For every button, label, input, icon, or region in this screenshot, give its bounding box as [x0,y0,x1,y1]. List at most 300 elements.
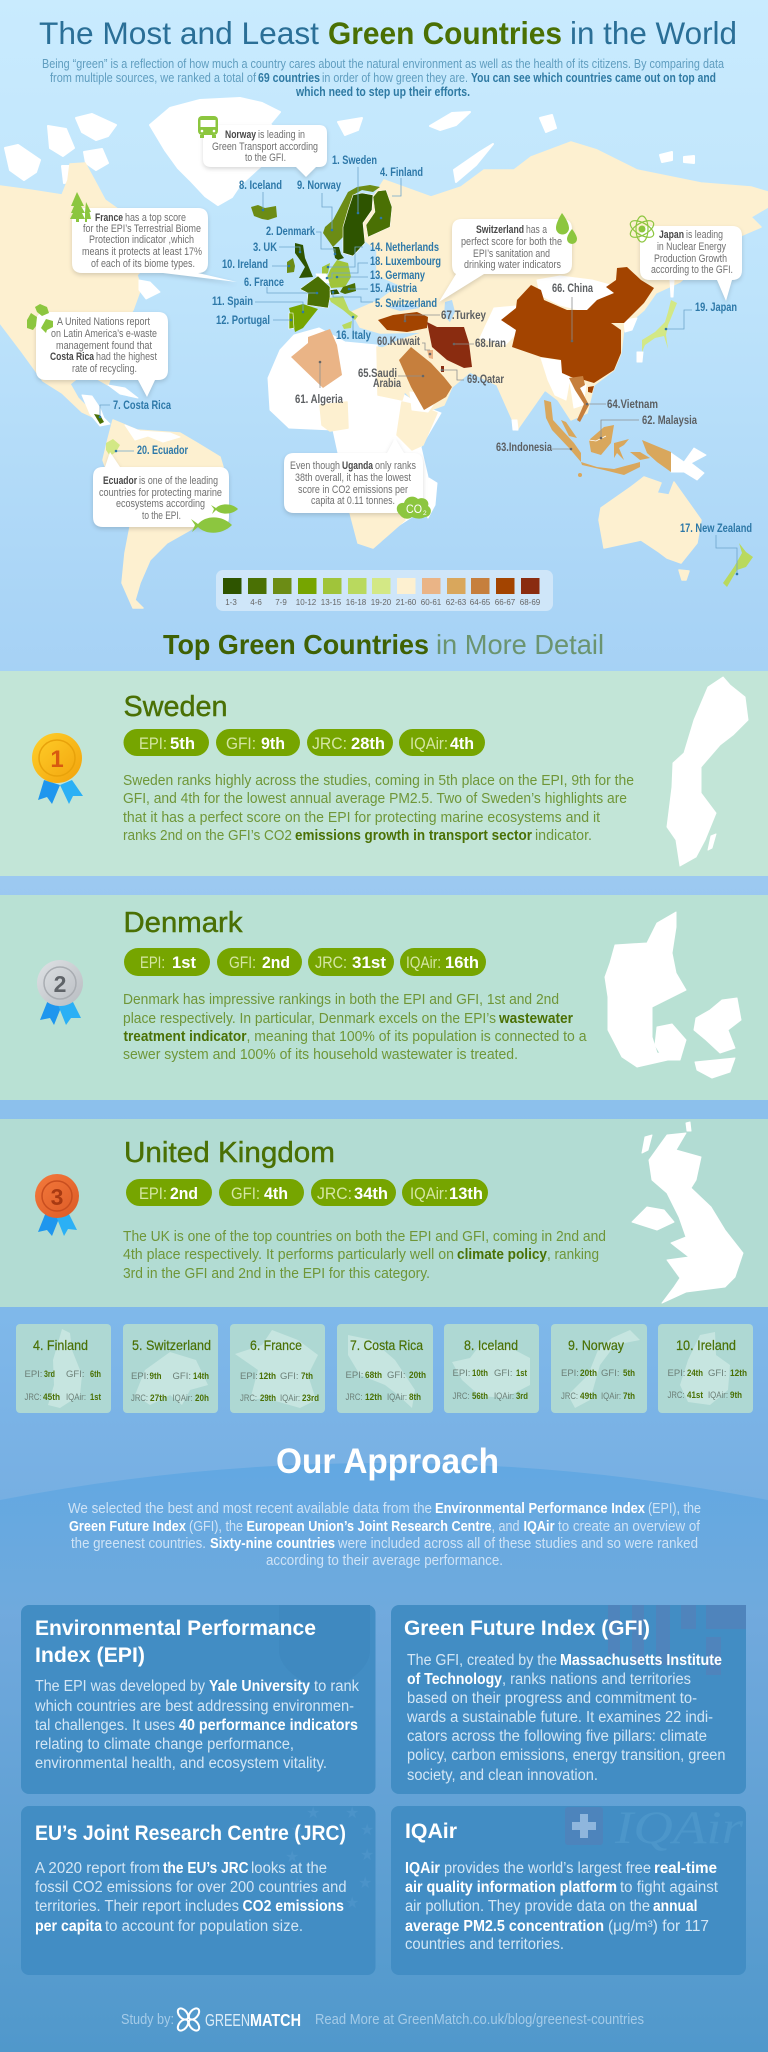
callout: Switzerland: drinking water indicators [464,259,561,271]
callout: Uganda: 38th overall, it has the lowest [295,472,411,484]
Switzerland [330,289,340,295]
body: the EU’s JRC [163,1860,248,1877]
ranking pills: 9th [261,734,285,753]
Caspian and Black Sea [444,300,455,322]
approach intro text: European Union’s Joint Research Centre [246,1519,492,1535]
ranking pills: EPI: [139,734,167,753]
Norway [323,185,380,247]
body: , ranks nations and territories [502,1671,691,1688]
footer: GREEN [205,2010,250,2030]
card: Iceland: JRC: [452,1391,470,1402]
body: to rank [314,1678,359,1695]
card: Costa Rica [337,1324,433,1413]
card: France: GFI: [280,1371,298,1382]
country labels: 14. Netherlands [370,242,439,254]
card: Costa Rica: 7. Costa Rica [350,1337,423,1353]
callout: Norway: to the GFI. [245,152,286,164]
card: Ireland: 12th [730,1368,747,1379]
Saudi Arabia [399,347,452,410]
leader lines [99,167,738,575]
body: Yale University [209,1678,310,1695]
approach intro text: were included across all of these studies and so were ranked [337,1536,698,1552]
heading: Denmark [124,907,243,939]
Qatar [441,366,444,372]
body: air pollution. They provide data on the [405,1898,650,1915]
callout: Japan: Japan [659,229,684,241]
icon: water drops [556,213,577,244]
card: Norway: JRC: [561,1391,578,1402]
body: society, and clean innovation. [407,1767,598,1784]
card: Iceland: 1st [516,1368,528,1379]
ranking pills: EPI: [140,953,165,972]
callout: Costa Rica: had the highest [96,351,157,363]
card: Costa Rica: 20th [409,1370,426,1381]
body: looks at the [251,1860,327,1877]
callout: Costa Rica: Costa Rica [50,351,95,363]
ranking pills: IQAir: [410,1184,448,1203]
description: place respectively. In particular, Denmark excels on the EPI’s [123,1011,496,1027]
map legend [216,570,553,611]
country labels: Arabia [373,378,401,390]
card: Switzerland: IQAir: [172,1393,192,1404]
approach intro text: IQAir [524,1519,555,1535]
Italy [329,296,358,320]
map: Sweden silhouette [667,677,748,866]
ranking pills: EPI: [139,1184,167,1203]
callout: Costa Rica: A United Nations report [57,316,150,328]
Austria [340,283,356,294]
country labels: 1. Sweden [332,155,377,167]
title: Green Countries [328,15,562,51]
panel: Denmark [0,895,768,1100]
map: Denmark silhouette [605,912,741,1078]
country labels: 6. France [244,277,284,289]
card: France: 7th [301,1371,313,1382]
country labels: 4. Finland [380,167,423,179]
callout: Norway: Norway [225,129,257,141]
watermark: EU stars: ★ [306,1895,320,1912]
description: indicator. [535,828,592,844]
ranking pills: 2nd [170,1184,198,1203]
body [405,1860,719,1953]
map legend: 16-18 [346,598,367,607]
body: IQAir [405,1860,440,1877]
ranking pills [124,948,486,976]
ranking pills: 34th [354,1184,388,1203]
ranking pills: 2nd [262,953,290,972]
callout: Uganda: Uganda [342,460,374,472]
card: Finland: GFI: [66,1369,84,1380]
intro text: in order of how green they are. [322,71,468,85]
body: real-time [654,1860,717,1877]
description [123,992,587,1063]
body: (μg/m³) for 117 [608,1918,709,1935]
watermark: EU stars: ★ [360,1847,374,1864]
body: air quality information platform [405,1879,617,1896]
map legend: 4-6 [250,598,262,607]
callout: Japan: according to the GFI. [651,264,733,276]
callout: Switzerland: perfect score for both the [461,236,562,248]
card: France: JRC: [240,1393,257,1404]
ranking pills: GFI: [231,1184,260,1203]
card: Finland: EPI: [24,1369,42,1380]
watermark: EU stars: ★ [285,1849,299,1866]
heading: Index (EPI) [35,1643,145,1667]
callout: France: France [95,212,123,224]
medal: second place [37,960,83,1025]
ranking pills: JRC: [317,1184,352,1203]
watermark: EU stars: ★ [306,1805,320,1822]
footer: MATCH [250,2010,301,2030]
callout: Uganda: only ranks [375,460,416,472]
card: Ireland: EPI: [668,1368,685,1379]
callout: Ecuador [93,452,229,527]
callout: Switzerland: Switzerland [476,224,524,236]
description: that it has a perfect score on the EPI for protecting marine ecosystems and it [123,810,600,826]
ranking pills: IQAir: [406,953,441,972]
Portugal [289,313,294,329]
card: Norway: IQAir: [601,1391,621,1402]
callout: Ecuador: Ecuador [103,475,138,487]
country labels: 19. Japan [695,302,737,314]
country labels: 17. New Zealand [680,523,752,535]
card: Iceland: 56th [472,1391,488,1402]
card: Finland: 6th [90,1369,101,1380]
description: emissions growth in transport sector [295,828,532,844]
approach intro text: (GFI), the [189,1519,243,1535]
Ecuador [106,439,120,456]
title: The Most and Least [39,15,319,51]
card: Norway: 49th [580,1391,597,1402]
Algeria [291,329,342,388]
panel: Sweden [0,671,768,876]
approach arc background [0,1463,768,1610]
card: Switzerland: 14th [193,1371,209,1382]
watermark: IQAir logo [565,1802,744,1854]
heading: Green Future Index (GFI) [404,1616,650,1640]
ranking pills: 16th [445,953,479,972]
description: Sweden ranks highly across the studies, coming in 5th place on the EPI, 9th for the [123,773,634,789]
card: Costa Rica: JRC: [346,1392,362,1403]
icon: trees [70,192,91,222]
body [34,1678,359,1772]
card: Switzerland: 27th [150,1393,167,1404]
map legend: 7-9 [275,598,287,607]
card: Norway [551,1324,647,1413]
country labels: 8. Iceland [239,180,282,192]
card: Costa Rica: 8th [409,1392,421,1403]
North America [0,163,155,418]
description: , ranking [547,1247,599,1263]
callout: Uganda: capita at 0.11 tonnes. [311,495,395,507]
Sweden [343,193,373,256]
description: climate policy [457,1247,547,1263]
card: France: 23rd [302,1393,319,1404]
callout: France: for the EPI’s Terrestrial Biome [83,223,201,235]
heading: United Kingdom [124,1137,335,1169]
description [123,1229,606,1282]
approach intro text: Environmental Performance Index [435,1501,645,1517]
panel: IQAir [391,1802,746,1975]
body: Massachusetts Institute [560,1652,722,1669]
France [300,276,330,308]
card: France: EPI: [240,1371,258,1382]
heading: Environmental Performance [35,1616,316,1640]
footer [121,2006,644,2033]
card: Norway: 20th [580,1368,597,1379]
card: Switzerland: 5. Switzerland [132,1337,211,1353]
icon: atom [628,216,656,242]
section heading: top green countries: Top Green Countries [163,629,429,660]
panel: JRC [21,1805,376,1975]
card: Switzerland: EPI: [131,1371,149,1382]
heading: IQAir [405,1819,458,1843]
country labels: 20. Ecuador [137,445,188,457]
card: Iceland: GFI: [494,1368,512,1379]
map legend: 13-15 [321,598,342,607]
medal: first place [32,733,83,804]
map legend: 1-3 [225,598,237,607]
intro text [42,57,724,99]
card: Costa Rica: 68th [365,1370,382,1381]
description: 3rd in the GFI and 2nd in the EPI for this category. [123,1266,430,1282]
Indonesia [544,400,671,477]
card: France: 12th [259,1371,276,1382]
country labels: 62. Malaysia [642,415,697,427]
intro text: which need to step up their efforts. [295,85,470,99]
ranking pills [124,729,485,756]
body [35,1860,346,1935]
body: of Technology [407,1671,502,1688]
watermark: EU stars: ★ [345,1805,359,1822]
card: Finland: IQAir: [66,1392,86,1403]
country labels: 66. China [552,283,593,295]
medal: second place: 2 [54,971,66,997]
description: Denmark has impressive rankings in both the EPI and GFI, 1st and 2nd [123,992,559,1008]
callout: France: has a top score [125,212,186,224]
callout: Norway: is leading in [258,129,305,141]
watermark: EU stars [285,1805,374,1912]
country labels: 7. Costa Rica [113,400,171,412]
callout: Uganda: Even though [290,460,340,472]
approach intro text: to create an overview of [558,1519,701,1535]
country labels: 12. Portugal [216,315,270,327]
Costa Rica [94,414,104,424]
watermark: IQAir logo: IQAir [614,1802,744,1854]
approach intro text: (EPI), the [648,1501,701,1517]
watermark: EU stars: ★ [345,1895,359,1912]
country labels: 10. Ireland [222,259,268,271]
footer: Study by: [121,2012,174,2028]
description: treatment indicator [124,1029,247,1045]
body: to fight against [620,1879,719,1896]
ranking pills: GFI: [229,953,256,972]
card: Ireland: 41st [687,1390,704,1401]
icon: GreenMatch logo [176,2006,201,2033]
callout: Costa Rica [36,312,168,397]
country labels: 16. Italy [336,330,371,342]
approach intro text: We selected the best and most recent available data from the [68,1501,432,1517]
description: ranks 2nd on the GFI’s CO2 [123,828,292,844]
card: Iceland [444,1324,539,1413]
ranking pills: JRC: [312,734,347,753]
ranking pills: 31st [352,953,386,972]
Iran [427,322,472,368]
icon: CO2 cloud: CO [406,502,422,516]
body: provides the world’s largest free [444,1860,651,1877]
ranking pills [126,1179,488,1206]
body: to account for population size. [105,1918,303,1935]
Spain [289,304,318,332]
approach intro text: according to their average performance. [266,1553,503,1569]
footer: Read More at GreenMatch.co.uk/blog/greenest-countries [315,2012,644,2028]
card: Iceland: IQAir: [494,1391,514,1402]
ranking pills: JRC: [315,953,347,972]
card: Ireland: IQAir: [708,1390,728,1401]
body [406,1652,726,1784]
card: Costa Rica: GFI: [387,1370,405,1381]
map legend: 10-12 [296,598,317,607]
map legend: 60-61 [421,598,442,607]
card: France [230,1324,325,1413]
callout: Japan [640,226,742,301]
Vietnam [569,376,589,422]
card: Finland: 3rd [44,1369,55,1380]
South America [103,420,223,608]
ranking pills: 4th [264,1184,288,1203]
approach intro text [68,1501,701,1569]
card: Iceland: 10th [472,1368,488,1379]
card: Norway: EPI: [561,1368,579,1379]
card: Costa Rica: EPI: [346,1370,363,1381]
body: per capita [35,1918,102,1935]
Ireland [287,258,295,273]
panel: EPI [21,1605,376,1794]
medal: third place [35,1174,79,1236]
country labels: 2. Denmark [266,226,315,238]
approach intro text: the greenest countries. [71,1536,206,1552]
ranking pills: 5th [170,734,195,753]
world map [0,98,768,608]
card: Switzerland: 9th [150,1371,162,1382]
icon: bus [198,116,218,138]
map legend: 66-67 [495,598,516,607]
medal: first place: 1 [50,746,64,773]
card: Iceland: 8. Iceland [464,1337,518,1353]
card: Ireland: 24th [687,1368,703,1379]
watermark: EU stars: ★ [290,1875,304,1892]
body: policy, carbon emissions, energy transition, green [407,1747,726,1764]
body: The EPI was developed by [35,1678,205,1695]
callout: Ecuador: to the EPI. [142,510,181,522]
approach intro text: Sixty-nine countries [210,1536,335,1552]
Kuwait [427,350,433,359]
intro text: 69 countries [258,71,320,85]
country labels: 61. Algeria [295,394,343,406]
Denmark [333,247,344,260]
callout: Uganda [284,438,423,513]
ranking pills: IQAir: [410,734,448,753]
New Guinea [671,448,706,480]
description: sewer system and 100% of its household wastewater is treated. [123,1047,518,1063]
description [123,773,634,844]
body: annual [653,1898,698,1915]
body: territories. Their report includes [35,1898,239,1915]
Africa [268,328,441,548]
watermark: EU stars: ★ [360,1822,374,1839]
body: based on their progress and commitment to- [407,1690,697,1707]
China [501,267,654,383]
country labels: 65.Saudi [358,368,397,380]
card: France: IQAir: [280,1393,300,1404]
body: fossil CO2 emissions for over 200 countries and [35,1879,346,1896]
callout: Uganda: score in CO2 emissions per [298,484,408,496]
Australia [599,477,701,563]
watermark: MIT logo [608,1605,746,1675]
heading: Our Approach: Our Approach [276,1442,499,1481]
callout: Costa Rica: rate of recycling. [72,363,137,375]
country labels: 63.Indonesia [496,442,552,454]
body: countries and territories. [405,1936,564,1953]
card: Ireland: 10. Ireland [676,1337,736,1353]
heading [35,1616,316,1667]
callout: Japan: Production Growth [654,253,727,265]
description: , meaning that 100% of its population is connected to a [246,1029,587,1045]
body: relating to climate change performance, [35,1736,294,1753]
card: Norway: GFI: [601,1368,619,1379]
Eurasia [352,142,768,430]
country labels: 68.Iran [475,338,506,350]
map: UK silhouette [632,1122,743,1303]
watermark: Yale shield [279,1605,370,1690]
card: Ireland: JRC: [668,1390,684,1401]
icon: CO2 cloud [397,497,431,519]
card: Switzerland: 20h [195,1393,209,1404]
Turkey [378,312,428,332]
country labels [113,155,752,535]
callout: Ecuador: is one of the leading [139,475,218,487]
ranking pills: GFI: [226,734,256,753]
callout: France: means it protects at least 17% [82,246,202,258]
card: Ireland: 9th [730,1390,742,1401]
ranking pills: 13th [449,1184,483,1203]
map legend: 68-69 [520,598,541,607]
callout: Japan: in Nuclear Energy [657,241,726,253]
callout: France [72,208,237,282]
country labels: 13. Germany [370,270,425,282]
card: Iceland: EPI: [452,1368,470,1379]
callout: Norway [203,125,327,177]
title [39,15,737,51]
callout: France: Protection indicator ,which [89,234,194,246]
body: tal challenges. It uses [35,1717,175,1734]
ranking pills: 1st [172,953,196,972]
title: in the World [570,15,737,51]
body: The GFI, created by the [407,1652,557,1669]
country labels: 9. Norway [297,180,341,192]
panel: GFI [391,1605,746,1794]
callout: Switzerland: EPI’s sanitation and [473,248,550,260]
ranking pills: 4th [450,734,474,753]
callout: Switzerland: has a [526,224,548,236]
card: France: 29th [260,1393,276,1404]
card: Finland: JRC: [24,1392,42,1403]
intro text: You can see which countries came out on top and [471,71,716,85]
callout: Japan: is leading [686,229,723,241]
card: Finland: 1st [90,1392,102,1403]
Malaysia border [589,436,606,441]
Japan [642,300,677,352]
